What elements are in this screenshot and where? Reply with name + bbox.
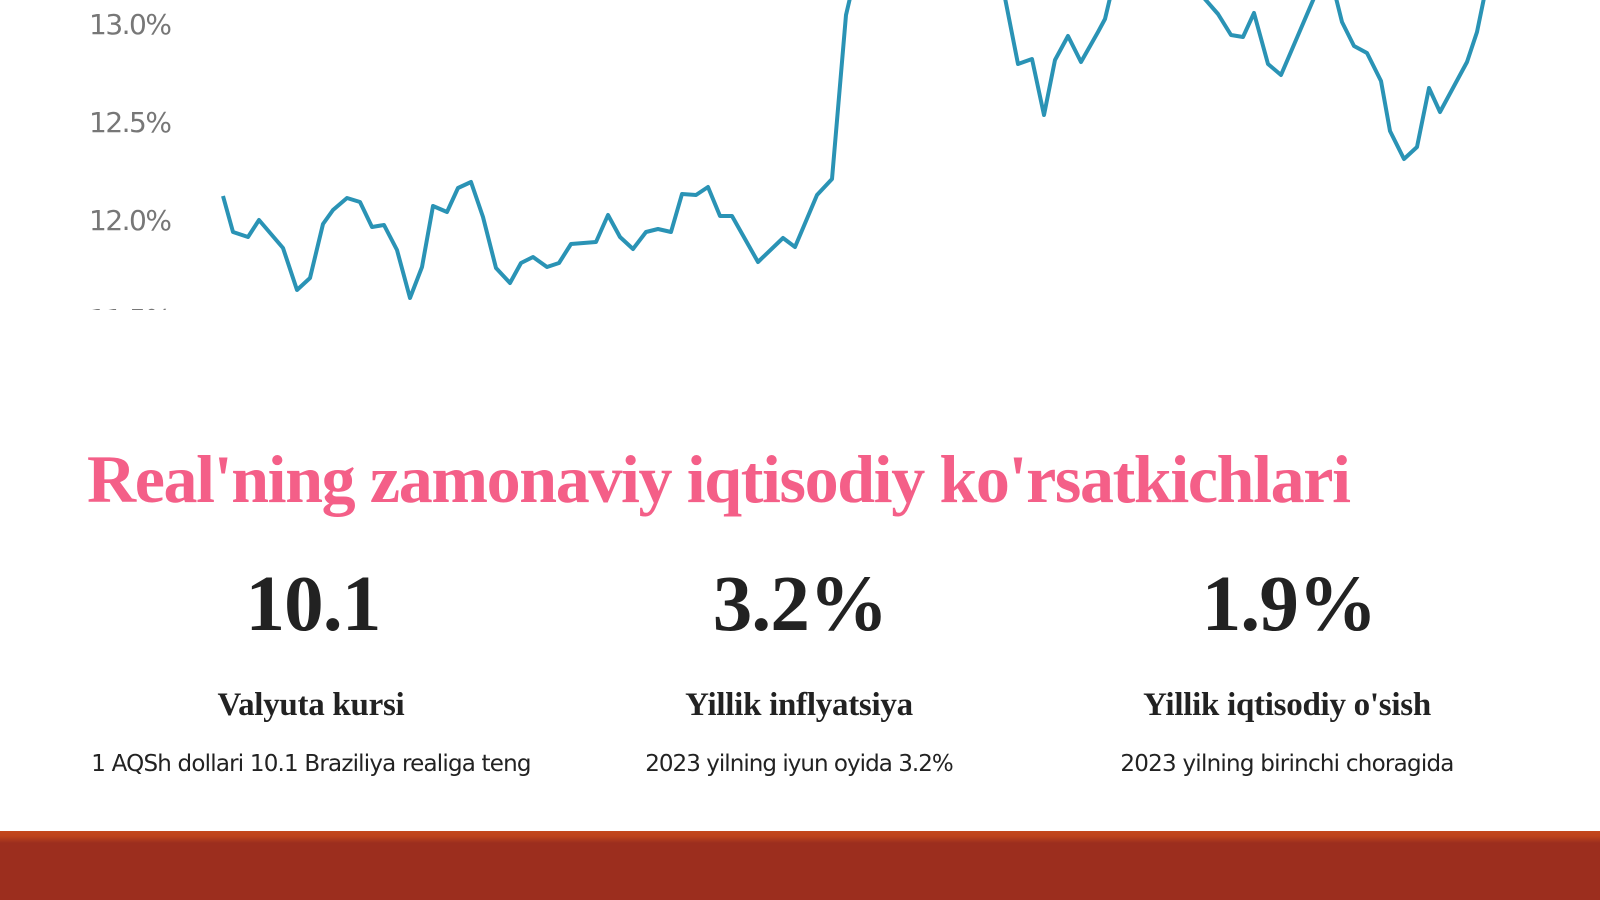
metric value: inflation: 3.2% bbox=[713, 561, 887, 648]
metric description: exchange rate: 1 AQSh dollari 10.1 Braziliya realiga teng bbox=[91, 751, 531, 777]
line chart: interest rate bbox=[89, 0, 1486, 310]
data line bbox=[223, 0, 1484, 298]
metric value: growth: 1.9% bbox=[1202, 561, 1376, 648]
y axis labels: 13.0% bbox=[89, 8, 171, 41]
y axis labels bbox=[89, 8, 171, 336]
metric description: inflation: 2023 yilning iyun oyida 3.2% bbox=[645, 751, 953, 777]
metric label: exchange rate: Valyuta kursi bbox=[218, 687, 404, 723]
metric description: growth: 2023 yilning birinchi choragida bbox=[1120, 751, 1454, 777]
footer band bbox=[0, 831, 1600, 900]
metric label: inflation: Yillik inflyatsiya bbox=[685, 687, 913, 723]
title: Real'ning zamonaviy iqtisodiy ko'rsatkichlari bbox=[87, 441, 1350, 517]
metric value: exchange rate: 10.1 bbox=[245, 561, 381, 648]
metric label: growth: Yillik iqtisodiy o'sish bbox=[1143, 687, 1431, 723]
y axis labels: 12.0% bbox=[89, 204, 171, 237]
y axis labels: 12.5% bbox=[89, 106, 171, 139]
